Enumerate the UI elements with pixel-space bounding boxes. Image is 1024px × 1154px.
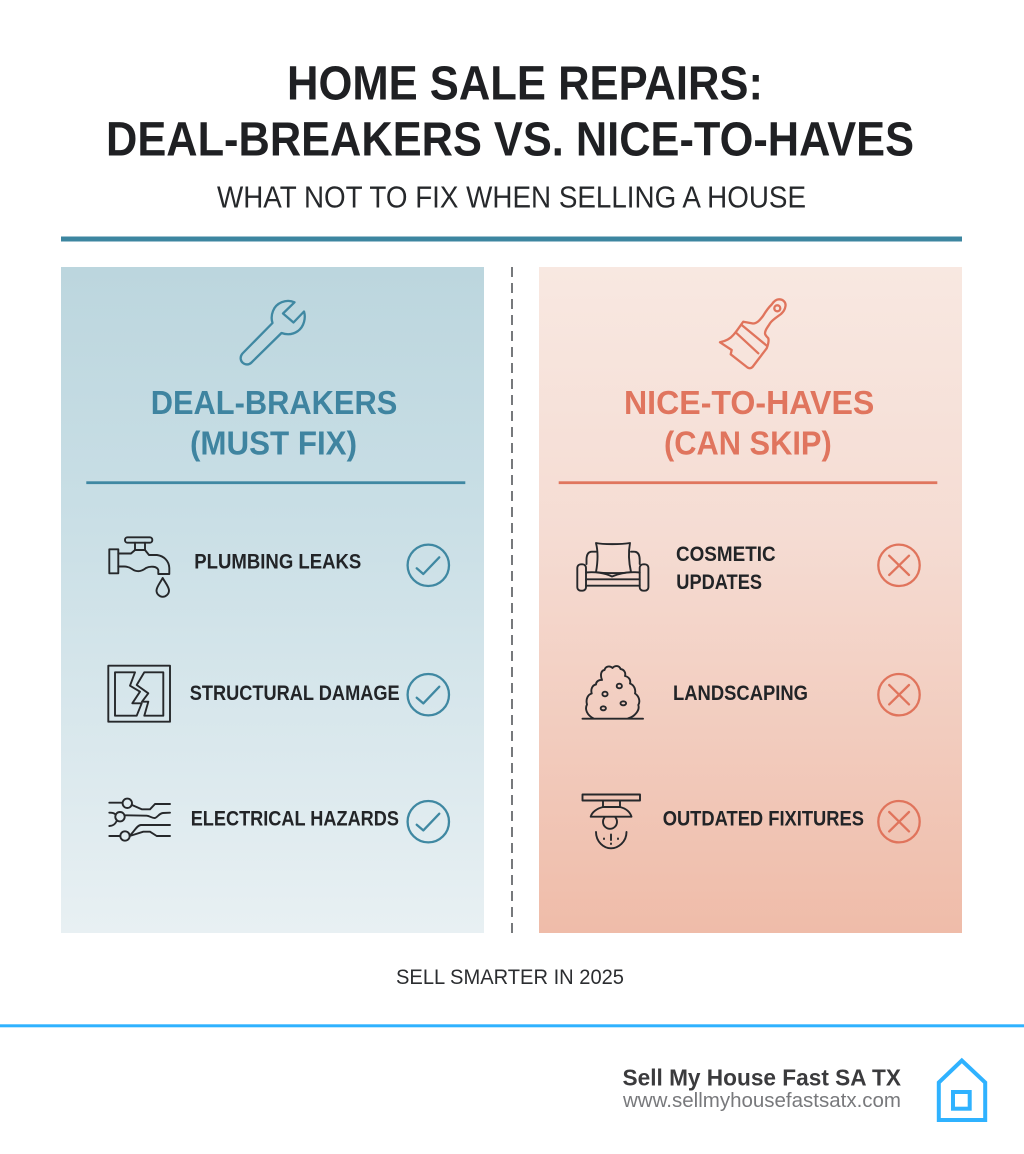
row: cosmetic updates bbox=[577, 543, 920, 594]
icon: cross bbox=[878, 545, 920, 586]
footer brand bbox=[622, 1065, 901, 1112]
icon: paint brush bbox=[720, 299, 786, 368]
icon: sofa bbox=[577, 543, 648, 591]
footer brand: www.sellmyhousefastsatx.com bbox=[622, 1090, 901, 1112]
header rule bbox=[61, 236, 962, 242]
label: cosmetic updates: UPDATES bbox=[676, 571, 762, 594]
row: landscaping bbox=[582, 666, 920, 719]
icon: house logo bbox=[939, 1060, 985, 1120]
divider: nice-to-haves bbox=[559, 481, 937, 484]
label: landscaping: LANDSCAPING bbox=[673, 682, 808, 705]
subtitle: WHAT NOT TO FIX WHEN SELLING A HOUSE bbox=[217, 180, 806, 214]
label: cosmetic updates bbox=[676, 543, 776, 594]
icon: wrench bbox=[241, 301, 305, 364]
icon: cross bbox=[878, 674, 920, 715]
icon: check bbox=[408, 545, 449, 586]
icon: shrub bbox=[582, 666, 643, 719]
row: electrical hazards bbox=[109, 799, 449, 842]
heading: nice-to-haves: NICE-TO-HAVES bbox=[624, 385, 874, 422]
center dashed divider bbox=[511, 267, 513, 934]
title bbox=[106, 58, 914, 167]
tagline: SELL SMARTER IN 2025 bbox=[396, 965, 624, 989]
icon: faucet bbox=[109, 537, 169, 597]
icon: wires bbox=[109, 799, 170, 841]
heading: deal-brakers: DEAL-BRAKERS bbox=[151, 385, 397, 422]
panel: deal-breakers bbox=[61, 267, 484, 933]
icon: check bbox=[408, 674, 449, 715]
label: cosmetic updates: COSMETIC bbox=[676, 543, 776, 566]
heading: nice-to-haves: (CAN SKIP) bbox=[664, 425, 832, 462]
footer brand: Sell My House Fast SA TX bbox=[622, 1065, 901, 1091]
icon: cross bbox=[878, 801, 920, 842]
heading: deal-brakers: (MUST FIX) bbox=[190, 425, 357, 462]
icon: cracked wall bbox=[108, 666, 170, 722]
icon: check bbox=[408, 801, 449, 842]
row: outdated fixtures bbox=[582, 794, 920, 848]
panel: nice-to-haves bbox=[539, 267, 962, 933]
label: electrical hazards: ELECTRICAL HAZARDS bbox=[191, 808, 399, 831]
heading: nice-to-haves bbox=[624, 385, 874, 462]
icon: ceiling lamp bbox=[582, 794, 640, 848]
title: DEAL-BREAKERS VS. NICE-TO-HAVES bbox=[106, 114, 914, 167]
divider: deal-breakers bbox=[86, 481, 465, 484]
title: HOME SALE REPAIRS: bbox=[287, 58, 763, 110]
row: structural damage bbox=[108, 666, 449, 722]
footer rule bbox=[0, 1024, 1024, 1027]
label: outdated fixtures: OUTDATED FIXITURES bbox=[663, 808, 864, 831]
heading: deal-brakers bbox=[151, 385, 397, 462]
row: plumbing leaks bbox=[109, 537, 449, 597]
label: structural damage: STRUCTURAL DAMAGE bbox=[190, 682, 400, 705]
label: plumbing leaks: PLUMBING LEAKS bbox=[194, 550, 361, 573]
